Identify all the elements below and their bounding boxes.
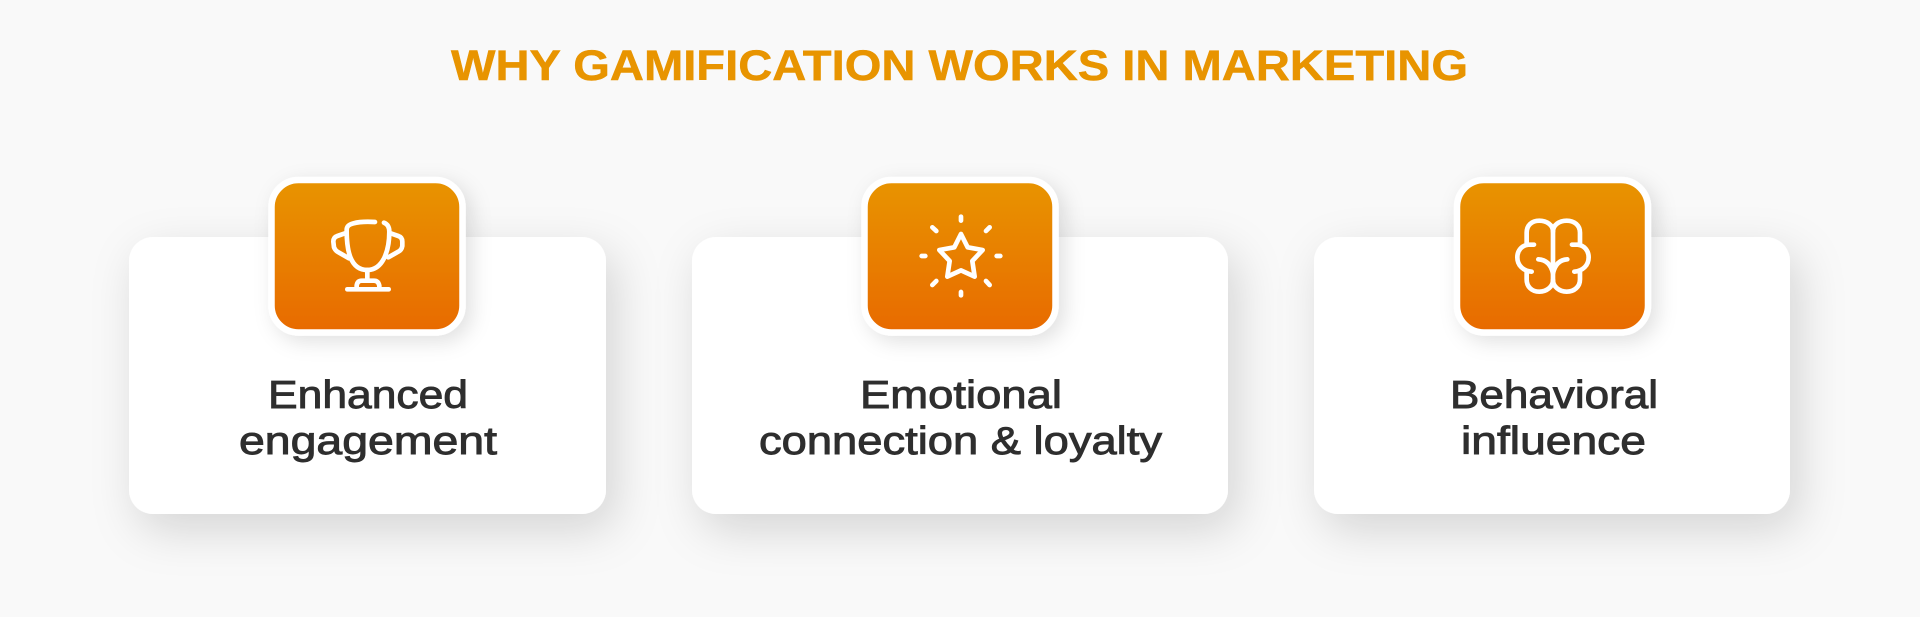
label: behavioral influence: Behavioral xyxy=(1450,374,1658,417)
icon: brain xyxy=(1517,221,1589,292)
label: emotional connection and loyalty: Emotional xyxy=(860,374,1062,417)
card background xyxy=(1314,237,1790,514)
card background xyxy=(692,237,1228,514)
label: enhanced engagement xyxy=(239,374,497,463)
label: enhanced engagement: engagement xyxy=(239,420,497,463)
panel: emotional connection xyxy=(692,180,1228,514)
title: WHY GAMIFICATION WORKS IN MARKETING xyxy=(451,42,1468,90)
panel: enhanced engagement xyxy=(129,180,606,514)
label: behavioral influence: influence xyxy=(1461,420,1646,463)
icon tile: brain xyxy=(1457,180,1648,332)
icon: trophy xyxy=(333,222,402,289)
label: emotional connection and loyalty xyxy=(759,374,1163,463)
icon tile: star xyxy=(864,180,1056,332)
icon: star xyxy=(922,217,1000,295)
card background xyxy=(129,237,606,514)
label: enhanced engagement: Enhanced xyxy=(268,374,468,417)
label: emotional connection and loyalty: connection & loyalty xyxy=(759,420,1163,463)
label: behavioral influence xyxy=(1450,374,1658,463)
panel: behavioral influence xyxy=(1314,180,1790,514)
icon tile: trophy xyxy=(272,180,462,332)
